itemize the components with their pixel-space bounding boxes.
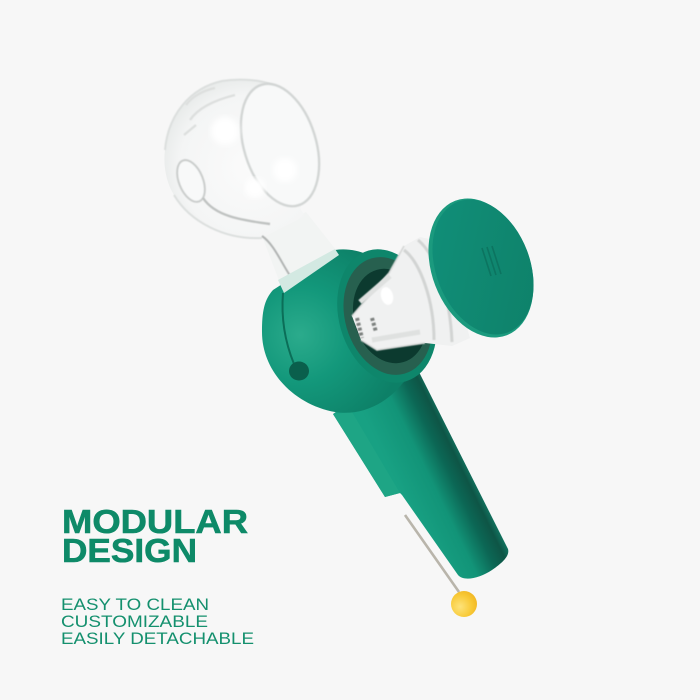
- heading: MODULAR: [62, 503, 248, 540]
- handle side flange: [333, 412, 400, 497]
- collar band: [278, 249, 339, 293]
- icon: yellow-headed pin: [405, 515, 477, 617]
- ring: [322, 237, 452, 395]
- icon: green holder: [262, 237, 508, 579]
- bowl mouth: [227, 74, 333, 216]
- ball slot: [282, 293, 294, 364]
- holder ball: [262, 249, 425, 413]
- bowl side hole: [172, 156, 210, 206]
- feature list: EASY TO CLEAN: [61, 596, 209, 614]
- feature list: EASILY DETACHABLE: [61, 630, 254, 648]
- feature list: CUSTOMIZABLE: [61, 613, 208, 631]
- icon: glass bowl and neck: [164, 74, 336, 283]
- heading: [62, 503, 248, 569]
- ring cavity: [342, 260, 438, 372]
- bowl inner contour: [203, 198, 270, 224]
- cap logo: [482, 246, 501, 276]
- heading: DESIGN: [62, 532, 197, 569]
- feature list: [61, 596, 254, 648]
- handle: [333, 372, 508, 579]
- icon: glass plug: [352, 237, 470, 350]
- ring inner lip: [330, 246, 446, 386]
- icon: green cap: [409, 183, 553, 353]
- ball hole: [289, 362, 309, 380]
